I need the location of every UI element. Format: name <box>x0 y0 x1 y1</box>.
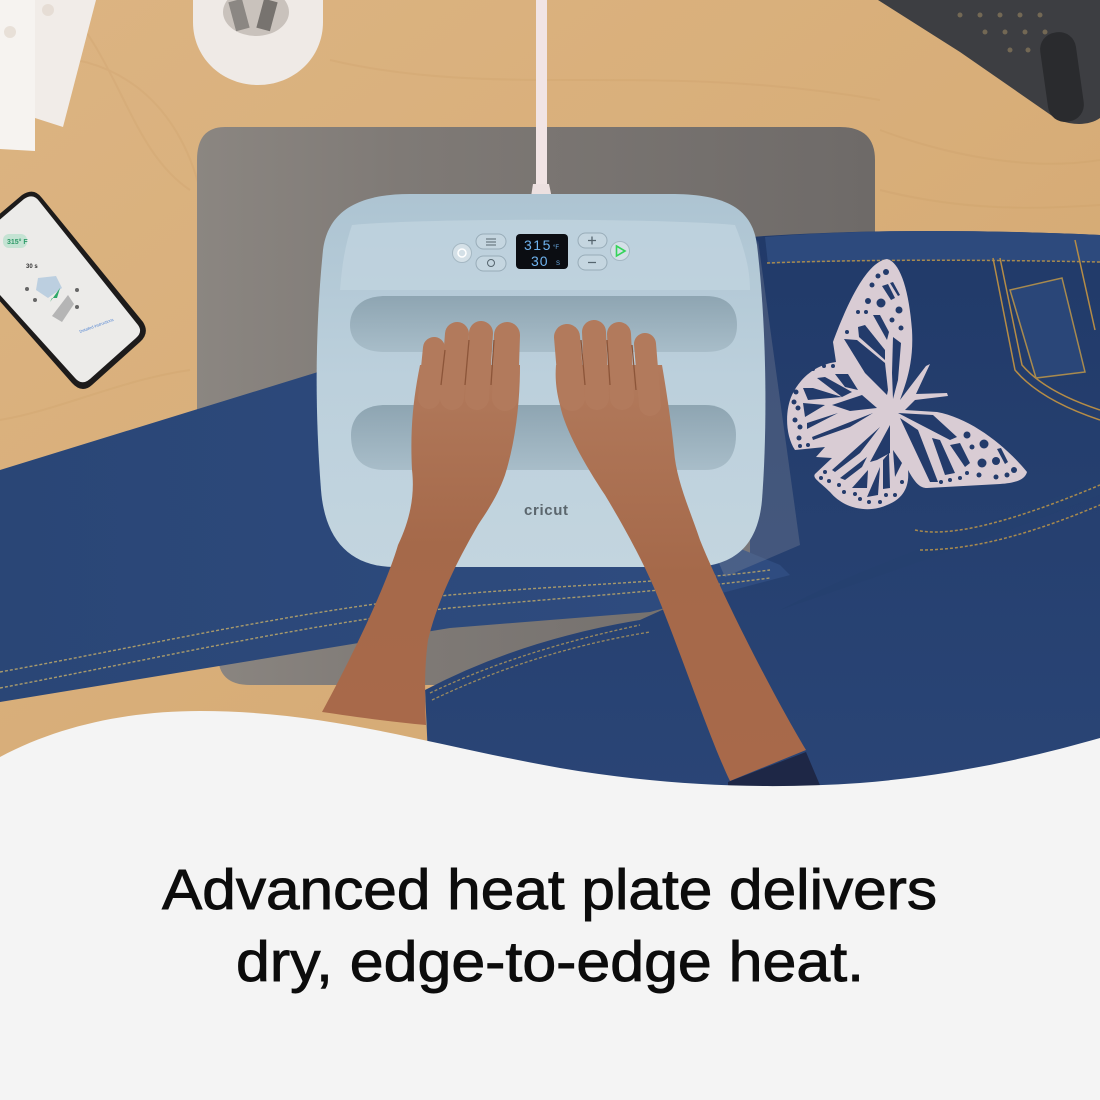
smartphone with app <box>0 192 146 389</box>
headline: dry, edge-to-edge heat. <box>236 930 864 994</box>
LED display: 315 <box>524 237 552 253</box>
cricut logo: cricut <box>524 502 568 519</box>
paper cards top left <box>0 0 96 151</box>
control: plus and minus buttons <box>578 233 607 270</box>
control: left buttons <box>476 234 506 271</box>
smartphone with app: 30 s <box>26 264 38 270</box>
jeans left leg <box>0 372 790 702</box>
upper handle recess <box>350 296 737 352</box>
right arm and hand <box>556 332 806 781</box>
control: start button <box>610 242 630 260</box>
left arm and hand <box>322 333 520 725</box>
butterfly heat transfer design <box>787 259 1027 509</box>
smartphone with app: 315° F <box>7 238 28 246</box>
smartphone with app: Detailed instructions <box>79 317 114 334</box>
white wave panel <box>0 711 1100 1100</box>
translucent protective sheet <box>700 240 800 577</box>
sweater sleeve <box>728 752 822 790</box>
cricut heat press body <box>317 194 765 567</box>
jeans right leg with waistband <box>425 231 1100 800</box>
pen holder top <box>193 0 323 85</box>
dark perforated tool top right <box>878 0 1100 124</box>
headline <box>162 858 937 994</box>
LED display: °F <box>553 245 559 251</box>
LED display: S <box>556 261 560 267</box>
gray pressing mat <box>197 127 875 685</box>
LED display <box>516 234 568 269</box>
power cord <box>530 0 553 203</box>
wood desk background <box>0 0 1100 800</box>
headline: Advanced heat plate delivers <box>162 858 937 922</box>
control: power button <box>452 244 472 262</box>
LED display: 30 <box>531 253 549 269</box>
lower handle recess <box>351 405 736 470</box>
